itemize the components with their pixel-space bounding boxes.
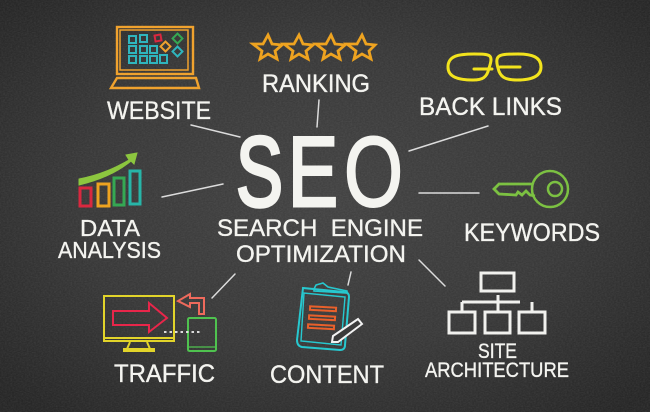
back links panel [419,54,562,121]
subtitle: Search Engine Optimization: OPTIMIZATION [236,241,406,268]
site architecture panel: ARCHITECTURE [425,359,569,382]
icon: laptop [111,27,199,88]
keywords panel [464,171,600,247]
title: SEO: O [344,116,403,227]
data analysis panel: ANALYSIS [58,237,161,263]
icon: clipboard and pencil [297,283,362,350]
icon: stars [253,35,375,59]
icon: sitemap hierarchy [449,273,545,333]
icon: monitor, tablet and arrows [104,294,216,351]
title: SEO: E [288,116,338,227]
site architecture panel [425,273,569,382]
label: site architecture: SITE [478,340,517,363]
label: keywords: KEYWORDS [464,219,600,247]
label: content: CONTENT [270,361,384,389]
subtitle: Search Engine Optimization: SEARCH ENGINE [217,215,423,242]
website panel [107,27,211,125]
label: traffic: TRAFFIC [114,360,215,388]
title: SEO: S [236,116,283,227]
ranking panel [253,35,375,98]
icon: bar chart with arrow [79,153,140,206]
data analysis panel [58,153,161,263]
icon: chain links [448,54,541,80]
content panel [270,283,384,389]
subtitle: Search Engine Optimization [217,215,423,268]
label: data analysis: DATA [80,215,141,241]
label: back links: BACK LINKS [419,93,562,121]
traffic panel [104,294,216,388]
label: ranking: RANKING [262,70,370,98]
label: website: WEBSITE [107,97,211,125]
title: SEO [236,116,403,227]
connector lines [162,100,488,298]
icon: key [494,171,568,207]
